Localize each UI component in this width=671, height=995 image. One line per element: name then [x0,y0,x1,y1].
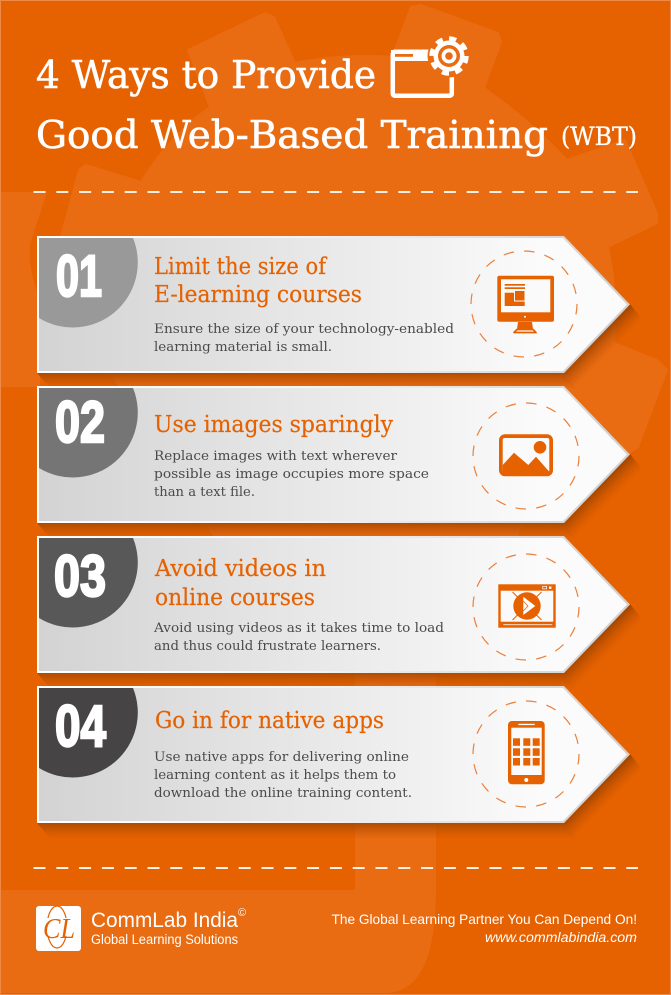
title [36,53,637,157]
panel: step 04: 04 [55,694,106,759]
title: 4 Ways to Provide [36,53,376,97]
panel: step 01 [37,236,642,388]
panel: step 01: learning material is small. [154,340,332,355]
panel: step 02: Use images sparingly [154,412,393,438]
panel: step 01: E-learning courses [154,282,362,308]
footer tagline and URL: The Global Learning Partner You Can Depend On! [332,911,637,927]
panel: step 01: Limit the size of [154,254,327,280]
panel: step 02: Replace images with text wherever [154,449,398,464]
panel: step 04 [37,686,642,838]
logo: CommLab India: © [238,907,246,919]
panel: step 03: Avoid videos in [154,556,326,582]
icon: smartphone [508,721,545,784]
panel: step 03 [37,536,642,688]
panel: step 02 [37,386,642,538]
title: (WBT) [561,122,637,151]
panel: step 03: and thus could frustrate learners. [154,639,381,654]
panel: step 04: download the online training content. [154,786,412,801]
panel: step 02: 02 [55,390,105,455]
panel: step 04: learning content as it helps them to [154,768,396,783]
panel: step 03: 03 [54,544,106,609]
icon: browser window with gear [391,34,470,96]
panel: step 02: than a text file. [154,485,255,500]
footer tagline and URL: www.commlabindia.com [485,929,637,945]
panel: step 02: possible as image occupies more space [154,467,429,482]
logo: CommLab India: Global Learning Solutions [91,932,238,947]
panel: step 03: online courses [155,585,315,611]
panel: step 01: Ensure the size of your technology-enabled [154,322,454,337]
title: Good Web-Based Training [36,113,548,157]
icon: desktop monitor [497,276,554,332]
divider: top dashed line [34,191,638,193]
divider: bottom dashed line [34,867,638,869]
panel: step 04: Go in for native apps [155,708,384,734]
logo: CommLab India [36,906,246,951]
icon: video player window [498,584,556,628]
logo: CommLab India: CL [43,913,75,945]
logo: CommLab India: CommLab India [91,909,238,932]
icon: picture [499,434,553,476]
panel: step 03: Avoid using videos as it takes time to load [153,621,444,636]
panel: step 04: Use native apps for delivering online [154,750,409,765]
panel: step 01: 01 [56,244,102,309]
footer tagline and URL [332,911,637,945]
